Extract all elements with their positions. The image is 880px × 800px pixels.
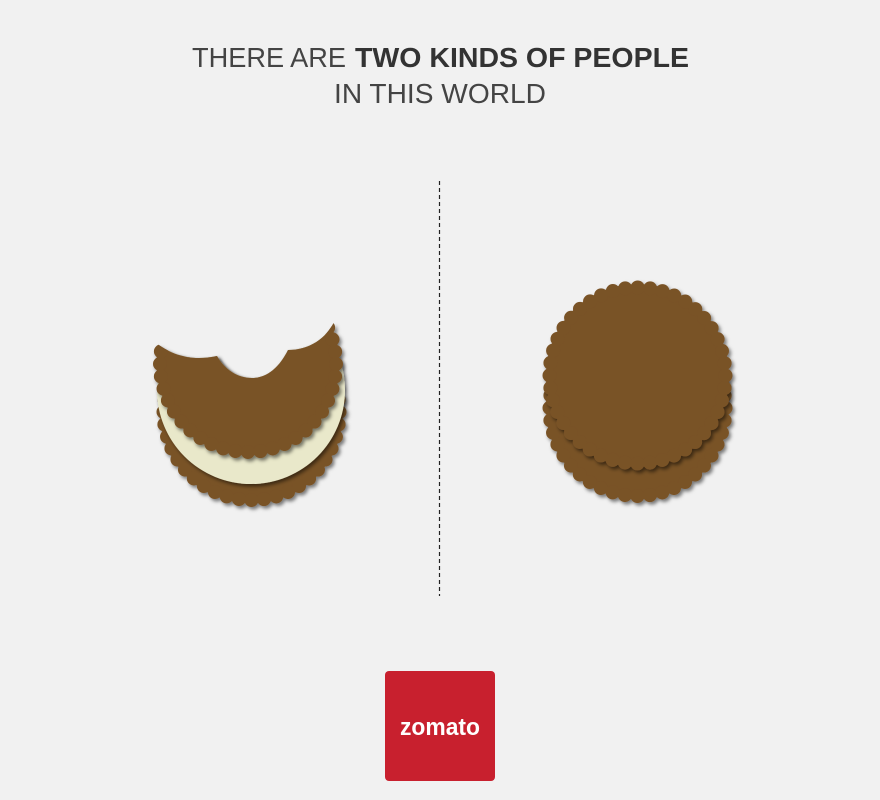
- title line 1: [192, 42, 689, 73]
- dashed divider: [438, 181, 440, 596]
- top bitten cookie: [152, 323, 348, 464]
- title line 1: TWO KINDS OF PEOPLE: [355, 42, 689, 73]
- title: [192, 42, 689, 109]
- logo wordmark: zomato: [400, 714, 480, 741]
- bottom cookie: [160, 320, 343, 504]
- left illustration: bitten sandwich cookie: [152, 323, 351, 512]
- title line 2: IN THIS WORLD: [334, 78, 546, 109]
- cream filling: [156, 338, 350, 488]
- zomato logo: [385, 671, 495, 781]
- top cookie: [546, 284, 729, 467]
- title line 1: THERE ARE: [192, 42, 346, 73]
- logo tile: [385, 671, 495, 781]
- right illustration: whole cookies without cream: [546, 284, 729, 500]
- bottom cookie: [546, 316, 729, 500]
